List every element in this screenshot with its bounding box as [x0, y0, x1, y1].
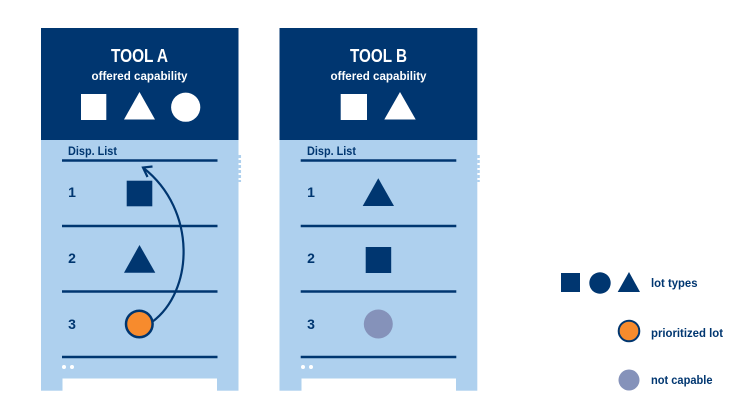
Tool A subtitle: offered capability — [92, 71, 188, 83]
white tab — [62, 378, 217, 391]
legend circle — [589, 272, 611, 294]
row number 2: 2 — [307, 250, 315, 266]
more-rows dots — [62, 365, 74, 369]
row number 3: 3 — [68, 316, 76, 332]
panel: Tool B — [280, 28, 478, 391]
icon: white triangle — [124, 92, 155, 120]
legend triangle — [618, 272, 640, 292]
lot triangle — [124, 245, 155, 273]
Tool B list background — [280, 140, 477, 391]
legend square — [561, 273, 580, 292]
Tool A list background — [41, 140, 238, 391]
Tool A title: TOOL A — [111, 46, 168, 66]
lot square — [127, 181, 152, 206]
row number 1: 1 — [307, 184, 315, 200]
icon: white triangle — [384, 92, 416, 120]
Tool B header — [280, 28, 477, 140]
Tool B title: TOOL B — [350, 46, 407, 66]
not capable lot — [364, 310, 393, 338]
row number 2: 2 — [68, 250, 76, 266]
lot triangle — [363, 178, 394, 206]
legend prioritized lot — [619, 321, 639, 341]
Tool B list heading: Disp. List — [307, 144, 356, 158]
arrow: reprioritize lot — [143, 166, 184, 322]
legend not capable — [618, 370, 640, 390]
icon: white square — [341, 94, 367, 120]
edge ticks — [477, 155, 480, 182]
icon: white square — [81, 94, 106, 120]
panel: Tool A — [41, 28, 240, 391]
lot square — [366, 247, 391, 273]
prioritized lot — [126, 311, 153, 337]
Tool B subtitle: offered capability — [330, 71, 427, 83]
legend — [561, 272, 723, 390]
more-rows dots — [301, 365, 313, 369]
icon: white circle — [171, 93, 200, 122]
legend label: not capable: not capable — [651, 375, 712, 387]
legend label: lot types: lot types — [651, 278, 698, 290]
Tool A list heading: Disp. List — [68, 144, 117, 158]
row number 1: 1 — [68, 184, 76, 200]
row dividers — [62, 160, 218, 357]
edge ticks — [239, 155, 241, 182]
Tool A header — [41, 28, 238, 140]
legend label: prioritized lot: prioritized lot — [651, 328, 723, 340]
white tab — [302, 378, 456, 391]
row number 3: 3 — [307, 316, 315, 332]
row dividers — [301, 160, 456, 357]
